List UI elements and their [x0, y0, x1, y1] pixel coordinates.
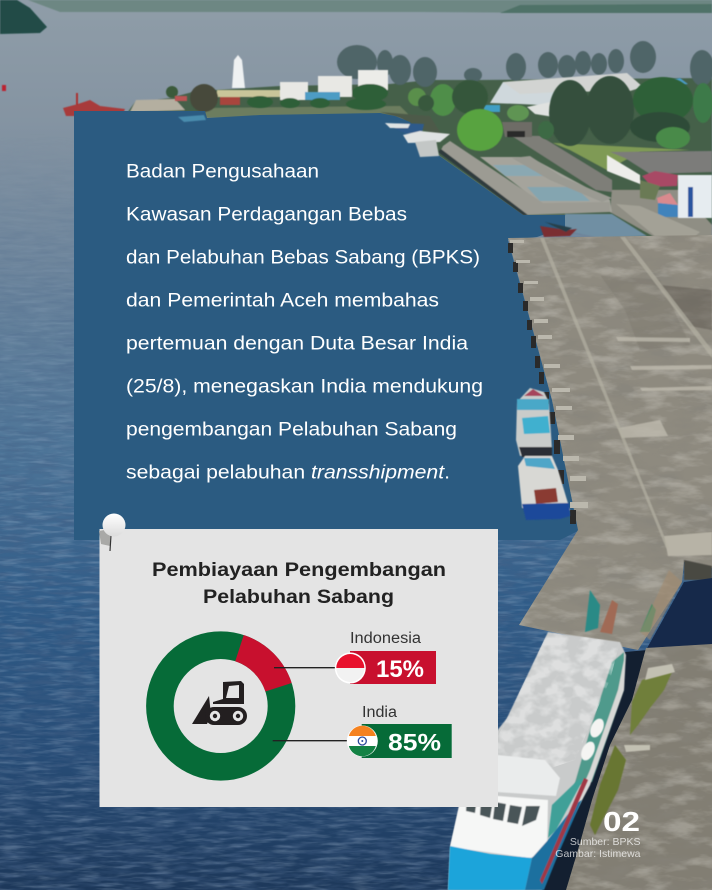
legend: Indonesia 15%: Indonesia — [350, 630, 421, 647]
conifers on the skyline — [337, 41, 712, 87]
legend: Indonesia 15%: 15% — [376, 656, 424, 683]
waterfront buildings — [607, 151, 712, 243]
small boats on panel edge — [178, 115, 577, 237]
main quay — [508, 235, 712, 650]
panel body text: Badan Pengusahaan — [126, 160, 319, 182]
donut chart — [160, 635, 292, 767]
legend: India 85% — [347, 704, 452, 758]
legend: India 85%: India — [362, 704, 397, 721]
panel body text: sebagai pelabuhan transshipment . — [126, 462, 450, 484]
main panel — [74, 111, 580, 540]
right water and lower quay — [540, 578, 712, 890]
legend: India 85%: 85% — [388, 730, 441, 756]
harbour trees — [408, 76, 712, 151]
pier and basins — [438, 141, 647, 238]
card title: Pembiayaan Pengembangan — [152, 559, 446, 581]
panel body text — [126, 160, 483, 484]
panel body text: dan Pemerintah Aceh membahas — [126, 290, 439, 312]
red barge — [63, 100, 125, 116]
source credit: Gambar: Istimewa — [555, 848, 641, 860]
card title — [152, 559, 446, 608]
leader lines — [273, 668, 350, 741]
legend: Indonesia 15% — [335, 630, 436, 684]
chart card — [100, 529, 498, 807]
panel body text: dan Pelabuhan Bebas Sabang (BPKS) — [126, 246, 480, 268]
panel body text: (25/8), menegaskan India mendukung — [126, 376, 483, 398]
lighthouse and storage tanks — [2, 55, 388, 116]
background: harbour land and trees — [127, 41, 712, 240]
icon: bulldozer — [192, 681, 247, 725]
source credit: Sumber: BPKS — [570, 836, 640, 848]
background: distant hills — [0, 0, 712, 34]
panel body text: pertemuan dengan Duta Besar India — [126, 332, 468, 354]
panel body text: Kawasan Perdagangan Bebas — [126, 204, 407, 226]
source credit — [555, 836, 641, 860]
icon: pin — [99, 514, 126, 551]
ship — [448, 632, 626, 890]
quay fenders — [508, 243, 576, 524]
moored boats at quay — [516, 388, 570, 520]
card title: Pelabuhan Sabang — [203, 586, 394, 608]
icon: Indian flag — [347, 726, 378, 756]
page number: 02 — [603, 806, 640, 837]
panel body text: pengembangan Pelabuhan Sabang — [126, 418, 457, 440]
icon: Indonesian flag — [335, 652, 366, 684]
harbour buildings — [484, 73, 688, 137]
